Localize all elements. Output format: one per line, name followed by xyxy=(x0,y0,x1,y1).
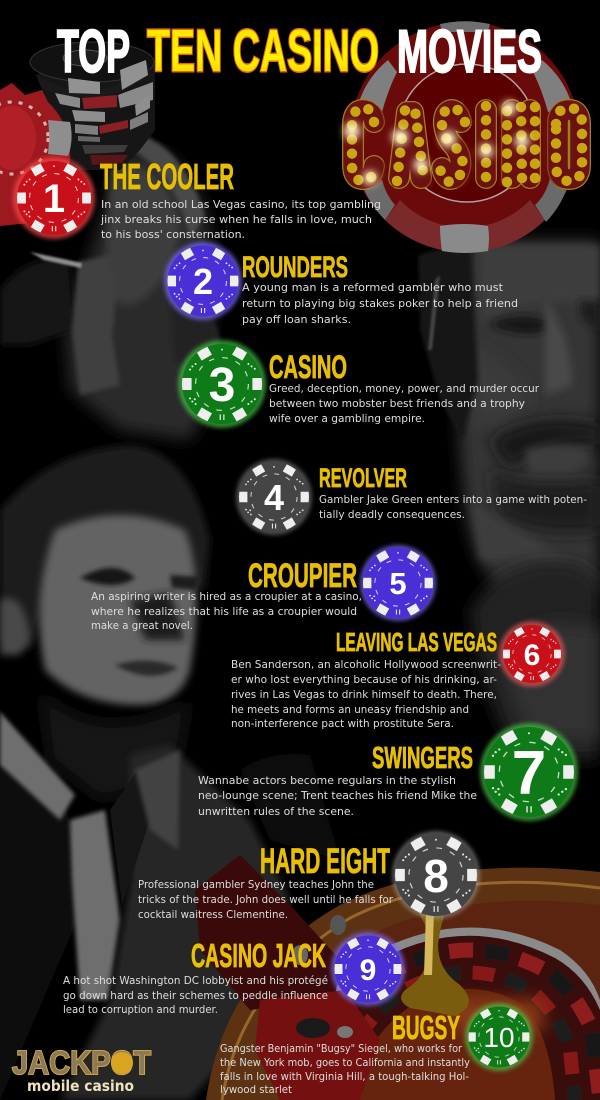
movie 8: Hard Eight: tricks of the trade. John does well until he falls for xyxy=(138,894,394,906)
movie 6: Leaving Las Vegas: he meets and forms an uneasy friendship and xyxy=(231,704,469,716)
movie 2: Rounders xyxy=(164,242,518,326)
movie 3: Casino: 3 xyxy=(209,359,235,412)
movie 2: Rounders: 2 xyxy=(193,261,213,302)
movie 7: Swingers: SWINGERS xyxy=(372,740,473,775)
movie 10: Bugsy: BUGSY xyxy=(392,1009,460,1046)
red dice xyxy=(195,855,380,1100)
movie 5: Croupier xyxy=(91,545,436,632)
movie 10: Bugsy: Gangster Benjamin "Bugsy" Siegel, who works for xyxy=(220,1043,463,1055)
movie 7: Swingers: Wannabe actors become regulars in the stylish xyxy=(198,775,456,787)
movie 1: The Cooler xyxy=(13,156,381,241)
movie 3: Casino: Greed, deception, money, power, and murder occur xyxy=(269,383,540,395)
movie 10: Bugsy: falls in love with Virginia Hill, a tough-talking Hol- xyxy=(220,1071,469,1083)
movie 3: Casino: between two mobster best friends and a trophy xyxy=(269,398,525,410)
movie 2: Rounders: A young man is a reformed gambler who must xyxy=(242,282,503,294)
movie 7: Swingers: unwritten rules of the scene. xyxy=(198,806,354,818)
movie 2: Rounders: return to playing big stakes poker to help a friend xyxy=(242,298,518,310)
movie 8: Hard Eight: cocktail waitress Clementine. xyxy=(138,909,288,921)
title: TOP xyxy=(57,18,130,85)
photo: young man, right xyxy=(470,562,600,760)
movie 9: Casino Jack: 9 xyxy=(360,954,376,987)
movie 3: Casino: wife over a gambling empire. xyxy=(269,413,425,425)
movie 10: Bugsy: lywood starlet xyxy=(220,1084,292,1096)
movie 8: Hard Eight: HARD EIGHT xyxy=(260,842,390,881)
movie 6: Leaving Las Vegas: rives in Las Vegas to drink himself to death. There, xyxy=(231,689,497,701)
movie 2: Rounders: ROUNDERS xyxy=(242,251,348,284)
movie 6: Leaving Las Vegas: er who lost everything because of his drinking, ar- xyxy=(231,674,497,686)
movie 8: Hard Eight xyxy=(138,831,480,921)
movie 10: Bugsy xyxy=(220,1003,533,1096)
movie 9: Casino Jack xyxy=(63,932,405,1016)
roulette wheel xyxy=(206,868,600,1100)
movie 1: The Cooler: jinx breaks his curse when he falls in love, much xyxy=(100,214,372,226)
red chip, left xyxy=(0,83,72,226)
movie 3: Casino: CASINO xyxy=(269,349,347,385)
movie 8: Hard Eight: Professional gambler Sydney teaches John the xyxy=(138,879,374,891)
movie 5: Croupier: where he realizes that his life as a croupier would xyxy=(91,606,357,618)
movie 5: Croupier: 5 xyxy=(389,566,407,601)
photo: woman smoking, top left xyxy=(0,132,220,440)
movie 3: Casino xyxy=(178,340,540,428)
movie 9: Casino Jack: CASINO JACK xyxy=(191,937,326,974)
movie 9: Casino Jack: lead to corruption and murder. xyxy=(63,1004,218,1016)
big poker chip behind sign xyxy=(350,21,580,253)
movie 6: Leaving Las Vegas xyxy=(231,621,565,730)
movie 1: The Cooler: 1 xyxy=(43,177,65,221)
movie 7: Swingers xyxy=(198,723,578,821)
movie 4: Revolver: Gambler Jake Green enters into a game with poten- xyxy=(319,494,587,506)
movie 4: Revolver: REVOLVER xyxy=(319,463,407,493)
photo: bearded man, right xyxy=(418,240,600,590)
logo: Jackpot mobile casino xyxy=(12,1044,151,1095)
movie 9: Casino Jack: A hot shot Washington DC lobbyist and his protégé xyxy=(63,975,328,987)
chip stack, top left xyxy=(30,42,155,170)
movie 4: Revolver: 4 xyxy=(264,477,284,518)
photo: man in suit, left xyxy=(0,445,340,1100)
movie 1: The Cooler: to his boss' consternation. xyxy=(101,229,245,241)
movie 6: Leaving Las Vegas: 6 xyxy=(524,639,540,672)
movie 6: Leaving Las Vegas: Ben Sanderson, an alcoholic Hollywood screenwrit- xyxy=(231,659,501,671)
movie 10: Bugsy: 10 xyxy=(483,1022,515,1053)
logo: Jackpot mobile casino: JACKPOT xyxy=(12,1044,151,1081)
movie 4: Revolver: tially deadly consequences. xyxy=(319,509,465,521)
movie 4: Revolver xyxy=(236,459,587,535)
movie 9: Casino Jack: go down hard as their schemes to peddle influence xyxy=(63,990,328,1002)
movie 2: Rounders: pay off loan sharks. xyxy=(242,314,351,326)
movie 5: Croupier: CROUPIER xyxy=(248,557,357,595)
movie 10: Bugsy: the New York mob, goes to California and instantly xyxy=(220,1057,470,1069)
movie 6: Leaving Las Vegas: LEAVING LAS VEGAS xyxy=(336,627,497,657)
movie 7: Swingers: neo-lounge scene; Trent teaches his friend Mike the xyxy=(198,790,477,802)
roulette spindle xyxy=(401,897,469,1016)
logo: Jackpot mobile casino: mobile casino xyxy=(27,1077,134,1095)
movie 5: Croupier: make a great novel. xyxy=(91,620,193,632)
movie 1: The Cooler: THE COOLER xyxy=(100,156,234,197)
movie 5: Croupier: An aspiring writer is hired as a croupier at a casino, xyxy=(91,591,362,603)
movie 8: Hard Eight: 8 xyxy=(423,850,449,902)
title: TEN CASINO xyxy=(147,18,379,84)
movie 6: Leaving Las Vegas: non-interference pact with prostitute Sera. xyxy=(231,718,454,730)
movie 1: The Cooler: In an old school Las Vegas casino, its top gambling xyxy=(101,199,381,211)
movie 7: Swingers: 7 xyxy=(512,739,546,808)
